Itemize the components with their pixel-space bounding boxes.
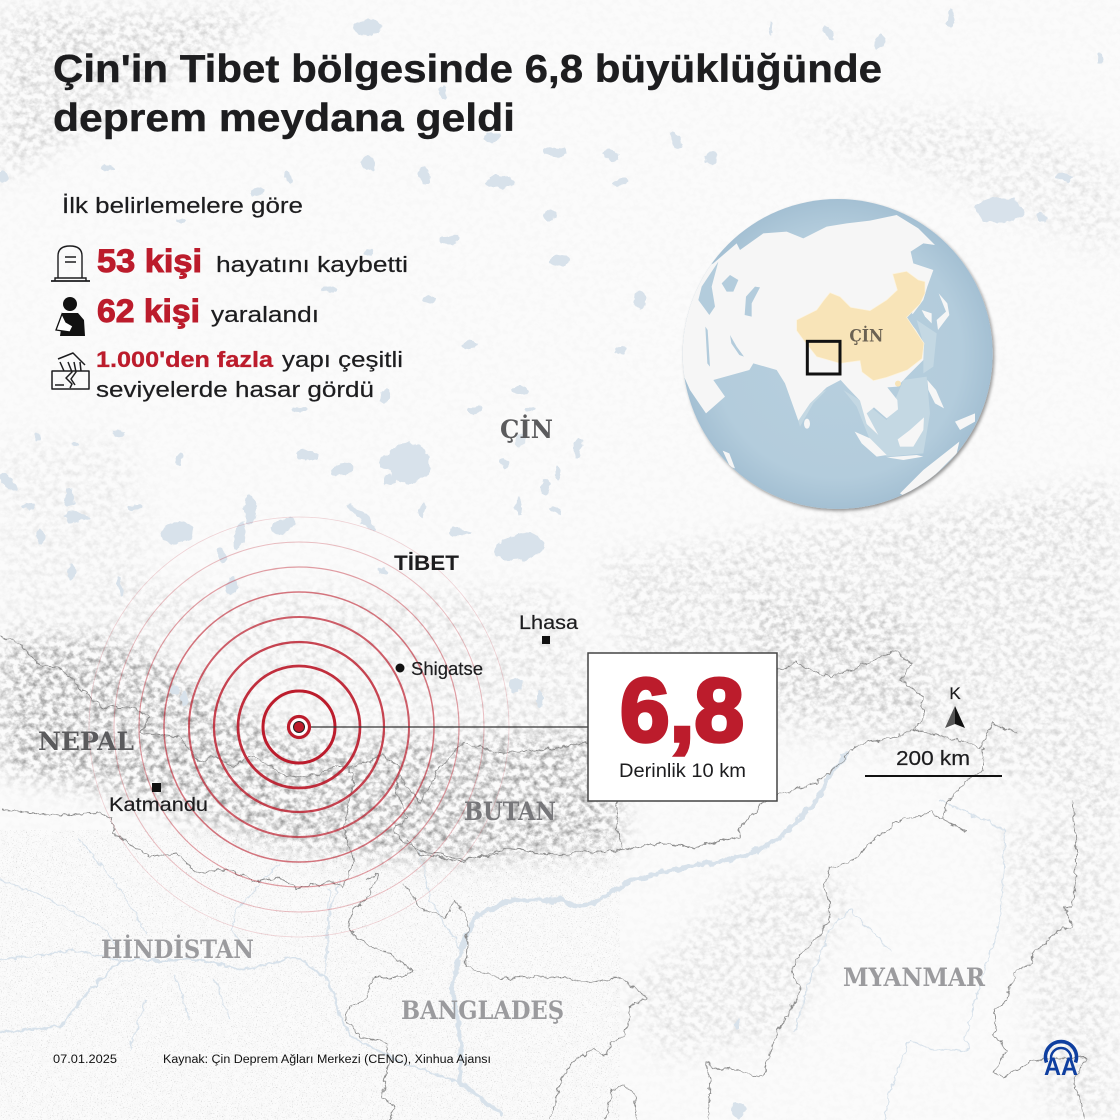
locator box	[807, 341, 840, 374]
label: Nepal: NEPAL	[38, 727, 134, 756]
logo: AA	[1044, 1042, 1078, 1081]
stat: damaged buildings	[52, 347, 403, 402]
label: China on globe: ÇİN	[849, 325, 883, 345]
inland seas	[698, 262, 913, 367]
label: India: HİNDİSTAN	[101, 935, 254, 964]
label: China: ÇİN	[500, 415, 553, 444]
label: Kathmandu: Katmandu	[109, 795, 208, 816]
stat: deaths	[51, 243, 408, 281]
epicenter rings	[89, 517, 509, 937]
label: Shigatse: Shigatse	[411, 659, 483, 679]
stat: deaths: hayatını kaybetti	[216, 252, 408, 277]
north arrow: K	[949, 684, 961, 703]
icon: gravestone	[51, 246, 90, 281]
scale bar: 200 km	[896, 748, 970, 770]
stat: deaths: 53 kişi	[97, 243, 202, 279]
epicenter marker	[288, 716, 310, 738]
date: 07.01.2025	[53, 1054, 117, 1066]
magnitude callout	[588, 653, 777, 801]
magnitude callout: 6,8	[620, 661, 744, 761]
magnitude callout: Derinlik 10 km	[619, 761, 746, 782]
title: deprem meydana geldi	[53, 97, 515, 140]
icon: injured person	[56, 297, 85, 336]
stat: damaged buildings: 1.000'den fazla	[96, 347, 274, 372]
label: Tibet: TİBET	[394, 552, 459, 575]
leader line	[305, 726, 589, 728]
shelf seas	[787, 320, 937, 457]
stat: injured	[56, 293, 319, 336]
locator globe	[677, 199, 993, 509]
stat: injured: yaralandı	[211, 302, 319, 327]
China highlight	[797, 271, 925, 381]
country borders	[0, 635, 1085, 1120]
title	[53, 48, 882, 140]
stat: damaged buildings: yapı çeşitli	[282, 347, 403, 372]
label: Lhasa: Lhasa	[519, 613, 578, 634]
intro text: İlk belirlemelere göre	[62, 193, 303, 218]
scale bar	[865, 748, 1002, 777]
label: Kathmandu	[109, 783, 208, 816]
stat: damaged buildings: seviyelerde hasar gördü	[96, 377, 374, 402]
map labels	[38, 415, 985, 1025]
source: Kaynak: Çin Deprem Ağları Merkezi (CENC), Xinhua Ajansı	[163, 1054, 491, 1066]
large lakes	[387, 443, 429, 483]
rivers	[0, 753, 1005, 1120]
north arrow	[945, 684, 965, 728]
title: Çin'in Tibet bölgesinde 6,8 büyüklüğünde	[53, 48, 882, 91]
label: Bangladesh: BANGLADEŞ	[401, 996, 564, 1025]
label: Bhutan: BUTAN	[464, 797, 556, 826]
label: Myanmar: MYANMAR	[843, 963, 985, 992]
land	[677, 215, 975, 500]
icon: cracked house	[52, 353, 89, 389]
stat: injured: 62 kişi	[97, 293, 200, 329]
logo: AA: AA	[1044, 1053, 1078, 1081]
label: Lhasa	[519, 613, 578, 644]
